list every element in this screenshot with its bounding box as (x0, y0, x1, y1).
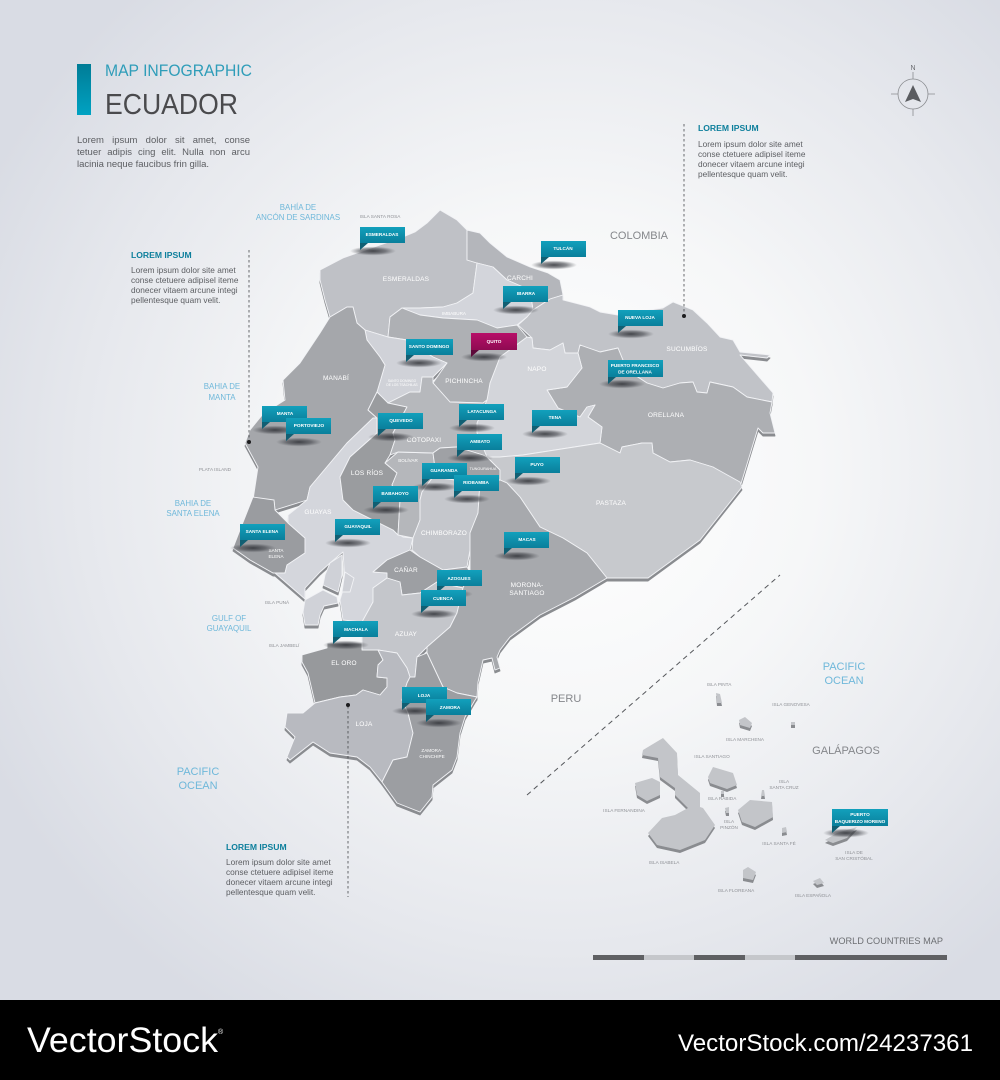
pin: Santo Domingo: SANTO DOMINGO (409, 344, 450, 349)
country and sea labels: ISLA JAMBELÍ (269, 642, 300, 648)
pin: Riobamba (444, 475, 499, 504)
province labels: GUAYAS (304, 509, 332, 516)
province: Loja (285, 650, 413, 782)
province: Zamora Chinchipe (382, 653, 477, 812)
province labels: TUNGURAHUA (470, 467, 497, 471)
province labels: SUCUMBÍOS (666, 344, 708, 353)
footer band (0, 1000, 1000, 1080)
pin: Macas: MACAS (518, 537, 536, 542)
pin: Manta (252, 406, 307, 434)
country and sea labels: PACIFIC (823, 661, 865, 673)
province labels: CARCHI (507, 275, 533, 282)
country and sea labels: ANCÓN DE SARDINAS (256, 213, 340, 222)
province: Canar (373, 550, 470, 595)
country and sea labels: PERU (551, 693, 581, 705)
subtitle: MAP INFOGRAPHIC (105, 62, 252, 80)
pin: Nueva Loja (608, 310, 663, 338)
pin: Puyo: PUYO (530, 462, 544, 467)
Galapagos labels: ISLA ISABELA (649, 860, 680, 865)
pin: Cuenca (411, 590, 466, 618)
registered mark: ® (218, 1028, 224, 1036)
province: Sucumbios (518, 295, 773, 402)
province labels (268, 275, 708, 759)
pin: Santa Elena (230, 524, 285, 552)
callout: top right text (682, 123, 806, 318)
pin: Tena (522, 410, 577, 438)
pin: Zamora: ZAMORA (440, 705, 461, 710)
pin: Santa Elena: SANTA ELENA (246, 529, 279, 534)
title block (77, 62, 252, 121)
island: Genovesa (791, 722, 795, 725)
dashed divider to Galapagos (527, 575, 780, 795)
province: Pichincha (388, 308, 527, 403)
island: Baltra (761, 790, 765, 796)
country and sea labels: BAHIA DE (204, 382, 240, 391)
island: Pinzon (725, 807, 729, 813)
country and sea labels: COLOMBIA (610, 230, 669, 242)
pin: Ibarra (493, 286, 548, 314)
callout body: Lorem ipsum dolor site amet (131, 265, 236, 275)
country and sea labels: GALÁPAGOS (812, 744, 880, 757)
pin: Ambato (447, 434, 502, 462)
mangrove islands (323, 555, 354, 592)
pin: Latacunga (449, 404, 504, 432)
province labels: AZUAY (395, 631, 418, 638)
Galapagos labels: ISLA DE (845, 850, 863, 855)
pin: Manta: MANTA (277, 411, 294, 416)
scale legend (593, 936, 947, 960)
callout body: conse ctetuere adipisel iteme (131, 275, 239, 285)
province: Azuay (362, 578, 463, 677)
Galapagos labels: ISLA FERNANDINA (603, 808, 646, 813)
callout body: donecer vitaem arcune integi (131, 285, 238, 295)
callout heading: LOREM IPSUM (131, 250, 192, 260)
Galapagos islands (635, 693, 857, 885)
province: Esmeraldas (320, 210, 477, 337)
province labels: ORELLANA (648, 412, 685, 419)
pin: Puerto Baquerizo Moreno: BAQUERIZO MORENO (835, 819, 886, 824)
Galapagos labels: ISLA SANTA FÉ (762, 840, 796, 846)
country and sea labels: ISLA SANTA ROSA (360, 214, 401, 219)
pin: Quevedo (368, 413, 423, 442)
province labels: CAÑAR (394, 565, 418, 574)
Galapagos labels: ISLA ESPAÑOLA (795, 892, 832, 898)
brand wordmark: VectorStock (27, 1021, 219, 1060)
callout body (131, 265, 239, 305)
province: Chimborazo (412, 477, 480, 570)
callout body: donecer vitaem arcune integi (698, 159, 805, 169)
pin: Puerto Francisco de Orellana (599, 360, 663, 388)
island: Santa Cruz (738, 800, 773, 827)
callout body: Lorem ipsum dolor site amet (226, 857, 331, 867)
callout heading: LOREM IPSUM (226, 842, 287, 852)
Galapagos labels: ISLA PINTA (707, 682, 732, 687)
province labels: COTOPAXI (407, 437, 441, 444)
footer background (0, 1000, 1000, 1080)
country and sea labels: OCEAN (824, 675, 864, 687)
pin: Esmeraldas: ESMERALDAS (366, 232, 398, 237)
pin: Tena: TENA (549, 415, 562, 420)
callout body (698, 139, 806, 179)
accent bar (77, 64, 91, 115)
province: Santa Elena (233, 497, 305, 573)
Galapagos labels: ISLA SANTIAGO (694, 754, 730, 759)
country and sea labels: BAHÍA DE (280, 203, 316, 212)
callout body: pellentesque quam velit. (131, 295, 220, 305)
icon: compass (891, 65, 935, 116)
country and sea labels: PLATA ISLAND (199, 467, 232, 472)
leader dot (346, 703, 350, 707)
Galapagos labels (603, 682, 873, 898)
intro text: Lorem ipsum dolor sit amet, conse (77, 135, 250, 146)
country and sea labels: SANTA ELENA (166, 509, 220, 518)
country and sea labels (166, 203, 880, 792)
province labels: IMBABURA (442, 311, 467, 316)
callout body: pellentesque quam velit. (698, 169, 787, 179)
Galapagos labels: ISLA FLOREANA (718, 888, 755, 893)
Galapagos labels: ISLA MARCHENA (726, 737, 765, 742)
leader line (347, 706, 349, 897)
island: Marchena (739, 717, 752, 728)
province labels: LOJA (355, 721, 373, 728)
Galapagos labels: PINZÓN (720, 824, 738, 830)
province: Isla Puna (303, 590, 338, 625)
province labels: SANTA (269, 548, 284, 553)
province labels: LOS RÍOS (351, 468, 384, 477)
pin: Loja: LOJA (418, 693, 431, 698)
province: Morona Santiago (427, 480, 607, 697)
scale caption: WORLD COUNTRIES MAP (830, 936, 943, 946)
leader line (683, 124, 685, 315)
leader dot (682, 314, 686, 318)
pin: Babahoyo: BABAHOYO (381, 491, 409, 496)
province labels: PASTAZA (596, 500, 626, 507)
province: Bolivar (385, 452, 435, 538)
province labels: MANABÍ (323, 373, 349, 382)
pin: Puerto Baquerizo Moreno (823, 809, 888, 838)
pin: Azogues: AZOGUES (447, 576, 471, 581)
province: Cotopaxi (388, 377, 487, 457)
province: Santo Domingo de los Tsachilas (365, 330, 447, 403)
callout body (226, 857, 334, 897)
scale bar (593, 955, 947, 960)
province labels: ESMERALDAS (383, 276, 430, 283)
image reference: VectorStock.com/24237361 (678, 1030, 973, 1057)
province labels: ZAMORA- (421, 748, 443, 753)
country and sea labels: GULF OF (212, 614, 246, 623)
pin: Tulcan (531, 241, 586, 270)
country and sea labels: MANTA (208, 393, 236, 402)
pin: Ambato: AMBATO (470, 439, 490, 444)
province: El Oro (302, 643, 387, 703)
province labels: DE LOS TSÁCHILAS (386, 383, 418, 387)
province labels: ELENA (268, 554, 284, 559)
pin: Ibarra: IBARRA (517, 291, 536, 296)
pin: Latacunga: LATACUNGA (468, 409, 497, 414)
pin: Machala: MACHALA (344, 627, 368, 632)
pin: Quevedo: QUEVEDO (389, 418, 413, 423)
province: Tungurahua (433, 447, 500, 482)
Galapagos labels: ISLA RÁBIDA (708, 795, 737, 801)
country and sea labels: PACIFIC (177, 766, 219, 778)
Galapagos labels: ISLA (779, 779, 790, 784)
leader line (248, 250, 250, 440)
pin: Portoviejo (276, 418, 331, 446)
pin: Guaranda: GUARANDA (430, 468, 458, 473)
province: Los Rios (340, 392, 410, 535)
callout body: conse ctetuere adipisel iteme (226, 867, 334, 877)
province: Imbabura (402, 263, 533, 328)
pin: Quito capital (461, 333, 517, 362)
island: Floreana (743, 867, 756, 880)
callout heading: LOREM IPSUM (698, 123, 759, 133)
pin: Puerto Francisco de Orellana: PUERTO FRANCISCO (611, 363, 660, 368)
province labels: SANTO DOMINGO (388, 379, 417, 383)
intro text: tetuer adipis cing elit. Nulla non arcu (77, 147, 250, 158)
callout: bottom text (226, 703, 350, 897)
province labels: SANTIAGO (509, 590, 545, 597)
province labels: MORONA- (511, 582, 543, 589)
province labels: EL ORO (331, 660, 357, 667)
Galapagos labels: ISLA GENOVESA (772, 702, 811, 707)
pin: Machala (323, 621, 378, 650)
pin: Guayaquil: GUAYAQUIL (344, 524, 372, 529)
pin: Azogues (427, 570, 482, 598)
pin: Puyo (505, 457, 560, 486)
callout body: pellentesque quam velit. (226, 887, 315, 897)
pin: Cuenca: CUENCA (433, 596, 454, 601)
province labels: BOLÍVAR (398, 457, 418, 463)
pin: Esmeraldas (350, 227, 405, 256)
leader dot (247, 440, 251, 444)
callout body: Lorem ipsum dolor site amet (698, 139, 803, 149)
heading: ECUADOR (105, 89, 238, 121)
pin: Portoviejo: PORTOVIEJO (294, 423, 325, 428)
island: Fernandina (635, 778, 660, 801)
country and sea labels: OCEAN (178, 780, 218, 792)
province labels: CHIMBORAZO (421, 530, 467, 537)
pin: Macas (494, 532, 549, 560)
province labels: PICHINCHA (445, 378, 483, 385)
island: Santa Fe (782, 827, 787, 833)
Galapagos labels: SAN CRISTÓBAL (835, 855, 873, 861)
Galapagos labels: SANTA CRUZ (769, 785, 799, 790)
island: San Cristobal (825, 827, 857, 843)
city pins (230, 227, 888, 838)
pin: Zamora (416, 699, 471, 728)
island: Pinta (716, 693, 722, 703)
province: Napo (477, 337, 602, 457)
callout body: donecer vitaem arcune integi (226, 877, 333, 887)
pin: Guayaquil (325, 519, 380, 548)
island: Santiago (708, 767, 737, 789)
province labels: CHINCHIPE (419, 754, 445, 759)
icon: compass: N (910, 65, 916, 72)
province: Guayas (275, 418, 413, 622)
province labels: NAPO (527, 366, 547, 373)
pin: Loja (392, 687, 447, 716)
province: Carchi (467, 230, 563, 310)
country and sea labels: ISLA PUNÁ (265, 599, 290, 605)
map of mainland Ecuador (233, 210, 775, 812)
pin: Puerto Francisco de Orellana: DE ORELLANA (618, 370, 653, 374)
pin: Guaranda (412, 463, 467, 492)
country and sea labels: GUAYAQUIL (207, 624, 252, 633)
intro text (77, 135, 250, 170)
pin: Babahoyo (363, 486, 418, 514)
pin: Riobamba: RIOBAMBA (463, 480, 490, 485)
pin: Santo Domingo (396, 339, 453, 368)
province: Manabi (245, 307, 385, 510)
province: Orellana (547, 345, 775, 487)
Galapagos labels: ISLA (724, 819, 735, 824)
intro text: lacinia neque faucibus frin gilla. (77, 159, 209, 170)
island: Espanola (813, 878, 824, 885)
pin: Nueva Loja: NUEVA LOJA (625, 315, 655, 320)
pin: Tulcan: TULCÁN (553, 245, 573, 251)
country and sea labels: BAHIA DE (175, 499, 211, 508)
island: Rabida (721, 791, 724, 794)
pin: Puerto Baquerizo Moreno: PUERTO (850, 812, 870, 817)
callout: left text (131, 250, 251, 444)
island: Isabela (642, 738, 715, 850)
callout body: conse ctetuere adipisel iteme (698, 149, 806, 159)
province: Pastaza (487, 443, 742, 578)
pin: Quito capital: QUITO (487, 339, 502, 344)
